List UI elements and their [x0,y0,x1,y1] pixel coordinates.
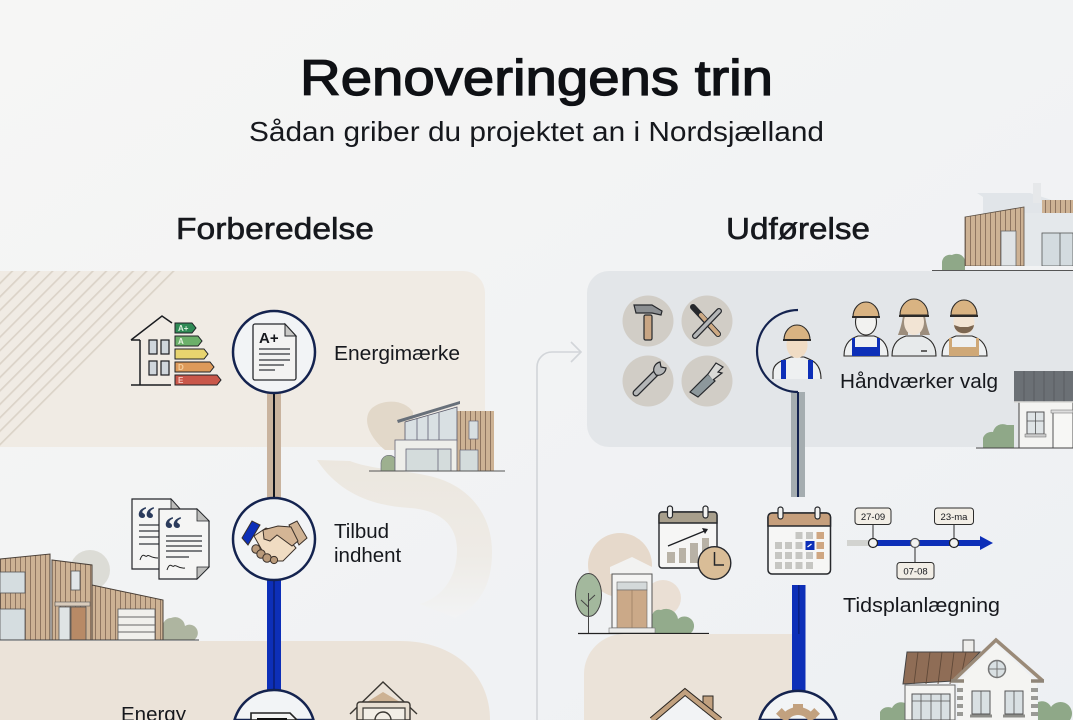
label: Tilbud indhent: indhent [334,544,402,567]
connector overlap: blue band over panel edge [792,634,806,691]
node circle [233,311,315,393]
workers group [844,299,987,356]
icon: quote documents [132,499,209,579]
worker: beard [942,300,987,356]
label: Tilbud indhent [334,520,402,567]
connector: Håndværker to Tidsplan [791,392,805,497]
panel: preparation bottom [0,641,490,720]
timeline [847,508,993,579]
icon: crossed tools [682,296,732,346]
illustration: modern house top right [932,183,1073,270]
date tag 23-ma [934,508,974,524]
icon: quote documents: “ [164,509,182,549]
icon: document badge [251,713,297,720]
node circle [233,498,315,580]
icon: house with energy scale: A [178,337,184,346]
icon: A+ document [253,324,296,380]
step: Tidsplanlægning [768,507,1000,617]
date tag 27-09: 27-09 [861,512,885,523]
subtitle: Sådan griber du projektet an i Nordsjælland [249,116,824,147]
hatched corner [0,271,181,447]
node circle [760,691,836,720]
step: Tilbud indhent [132,498,402,580]
icon: worker [773,325,821,379]
icon: house certificate [350,682,417,720]
label: Håndværker valg: Håndværker valg [840,371,998,393]
step: Energimærke [131,311,460,393]
icon: hammer [622,296,674,346]
icon: house with energy scale: D [178,363,184,372]
icon: schedule chart calendar [659,506,731,579]
icon: house with energy scale: A+ [178,324,189,333]
connector: Tidsplan to next [792,585,806,691]
connector: Energimærke to Tilbud [267,392,281,499]
icon: gear [776,704,820,720]
node arc [757,310,798,392]
icon: house outline in lower panel [652,692,720,720]
icon: wrench [622,356,674,406]
step: gear node [760,691,836,720]
label: Energimærke: Energimærke [334,343,460,365]
icon: pipe wrench [682,356,732,406]
flow arrow between columns [537,342,581,720]
connector: Tilbud to Energy [267,580,281,691]
illustration: small house with tree [576,533,709,634]
node circle [234,690,314,720]
icon: quote documents: “ [137,499,155,539]
worker: blue overalls [844,302,888,356]
panel: execution top [587,271,1073,447]
icon: house with energy scale [131,316,221,385]
title: Renoveringens trin [300,50,773,106]
panel: execution bottom [584,634,792,720]
date tag 27-09 [855,508,891,524]
decorative curved band [317,460,492,618]
illustration: large house bottom right [880,640,1072,720]
tools group [622,296,732,406]
date tag 07-08: 07-08 [903,566,928,578]
date tag 07-08 [897,562,934,579]
icon: handshake [242,521,307,564]
icon: calendar [768,507,830,574]
heading: Udførelse: Udførelse [726,211,870,246]
icon: house with energy scale: E [178,376,184,385]
worker: woman [892,299,936,356]
date tag 23-ma: 23-ma [941,512,968,523]
icon: A+ document: A+ [259,330,279,347]
illustration: grey roof house [976,371,1073,448]
step: Energy [121,682,417,720]
heading: Forberedelse: Forberedelse [176,211,374,246]
panel: preparation top [0,271,485,447]
step: Håndværker valg [757,310,821,392]
label: Tilbud indhent: Tilbud [334,520,389,543]
label: Tidsplanlægning: Tidsplanlægning [843,595,1000,617]
icon: modern house top [367,401,505,471]
icon: clock [698,547,731,579]
illustration: wooden house left [0,550,199,640]
